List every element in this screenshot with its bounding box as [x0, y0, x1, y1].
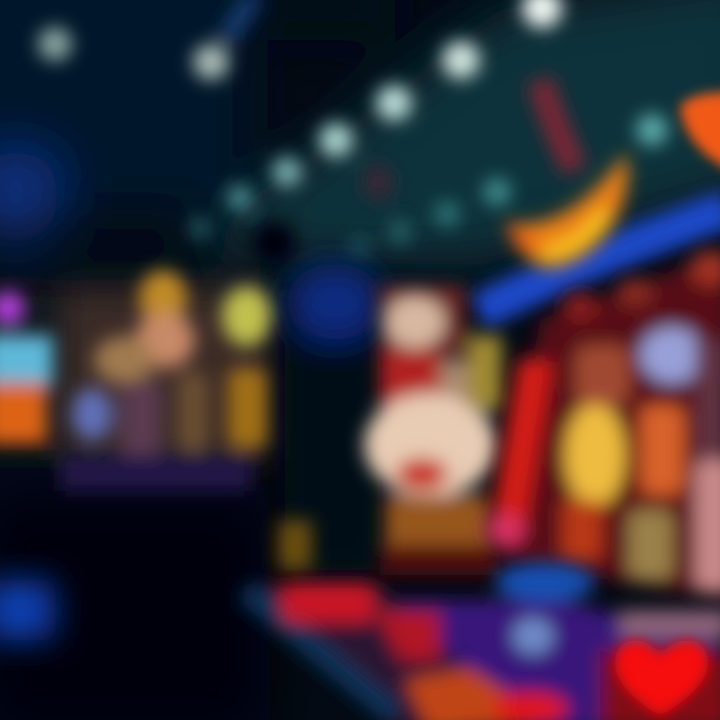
person silhouette	[285, 264, 383, 570]
slot machine: central white and red	[278, 285, 502, 575]
lower left blue glow	[0, 580, 55, 640]
slot machines: left cluster	[60, 290, 270, 460]
balloon: top right orange	[680, 92, 720, 172]
banner: blue arc	[478, 208, 720, 312]
floor: gaming table	[245, 562, 720, 720]
icon: red heart	[615, 640, 708, 716]
ceiling lights	[38, 0, 668, 265]
balloon: orange crescent	[506, 80, 628, 268]
slot machine: right red cabinet	[485, 250, 720, 600]
